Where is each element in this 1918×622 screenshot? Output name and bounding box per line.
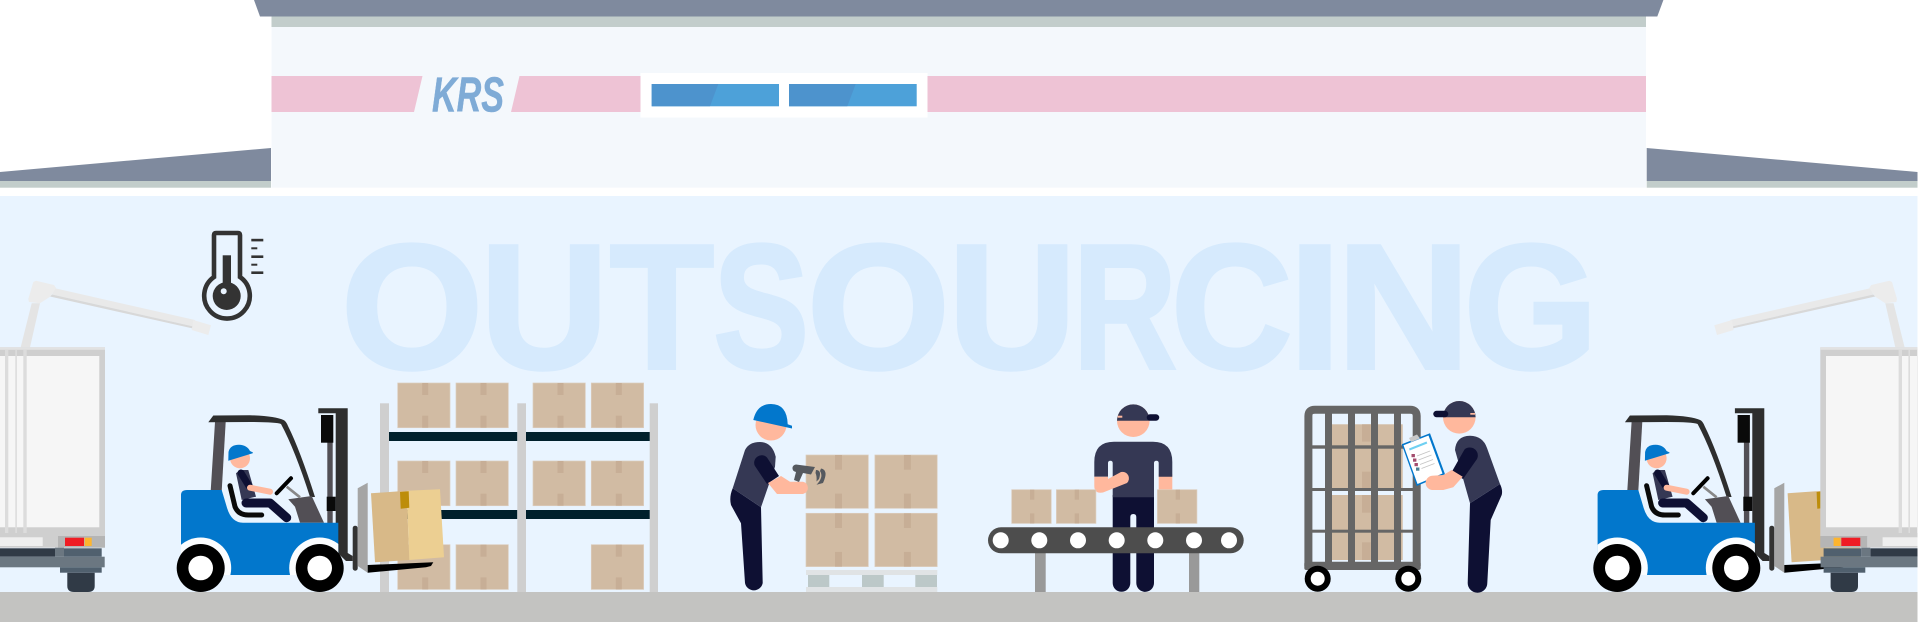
carried box	[371, 489, 444, 562]
forklift body	[181, 490, 338, 575]
left side roof fascia	[0, 181, 271, 188]
blue sign right	[789, 84, 917, 106]
driver	[228, 445, 287, 518]
wheel wells	[170, 538, 350, 598]
steering wheel	[277, 478, 291, 493]
seat	[230, 486, 262, 515]
cart wheels	[1305, 566, 1421, 592]
floor	[0, 592, 1918, 622]
right page edge	[1918, 0, 1919, 622]
right arm	[1159, 474, 1172, 491]
OUTSOURCING background title: O	[807, 209, 950, 406]
cap	[1443, 401, 1476, 417]
torso	[733, 442, 776, 507]
pink stripe left	[272, 76, 422, 112]
rear pillar	[211, 422, 226, 491]
head	[1117, 404, 1150, 437]
icon: thermometer	[204, 233, 263, 319]
head	[756, 410, 786, 440]
OUTSOURCING background title: C	[1171, 209, 1292, 406]
legs	[730, 488, 763, 590]
driver head	[230, 448, 250, 468]
rack posts	[380, 403, 658, 592]
pallet	[806, 570, 937, 592]
mast block	[327, 497, 336, 511]
torso	[1455, 436, 1500, 503]
white plate	[0, 537, 43, 546]
cage bars	[1304, 408, 1421, 570]
driver arm	[250, 488, 270, 492]
sleeve	[1452, 447, 1478, 479]
stacked boxes	[806, 455, 937, 567]
cap brim	[1436, 411, 1445, 417]
frame top strip	[0, 347, 105, 350]
right side roof fascia	[1647, 181, 1918, 188]
pink stripe right	[928, 76, 1646, 112]
OUTSOURCING background title: U	[948, 208, 1076, 406]
warehouse building	[0, 0, 1918, 188]
door bars	[5, 350, 27, 533]
lift cylinder	[321, 415, 333, 443]
tail light orange	[85, 538, 92, 546]
interior background	[0, 196, 1918, 592]
OUTSOURCING background title: I	[1289, 208, 1341, 406]
cab roof and front pillar	[208, 415, 315, 497]
forklift right	[1587, 408, 1861, 598]
tail light red	[65, 538, 84, 546]
steering column	[287, 487, 300, 497]
driver torso	[236, 470, 256, 500]
cargo door panel	[0, 356, 99, 527]
OUTSOURCING background title: O	[341, 208, 483, 406]
KRS logo: KRS	[432, 69, 504, 123]
dashboard	[288, 496, 324, 523]
driver sleeve	[241, 473, 249, 486]
cart boxes	[1332, 424, 1403, 560]
mast upright	[318, 408, 353, 561]
legs	[1113, 495, 1154, 592]
clipboard	[1402, 433, 1445, 486]
worker with scanner	[730, 404, 826, 590]
legs	[1468, 484, 1502, 593]
fork	[368, 562, 433, 573]
top roof	[254, 0, 1663, 16]
cargo box frame	[0, 347, 105, 536]
blue sign left	[652, 84, 779, 106]
cage frame	[1308, 410, 1417, 566]
truck rear right	[1714, 281, 1918, 592]
arm	[1426, 470, 1463, 490]
OUTSOURCING background title: T	[610, 208, 714, 406]
left arm	[1094, 472, 1129, 493]
backrest	[358, 483, 368, 573]
OUTSOURCING background title: G	[1464, 208, 1598, 406]
storage rack with boxes	[380, 383, 658, 592]
head	[1443, 401, 1476, 434]
truck rear left	[0, 281, 211, 592]
rollers	[993, 532, 1237, 548]
OUTSOURCING background title	[341, 208, 1598, 407]
left side roof	[0, 148, 271, 181]
roof arm	[21, 281, 211, 347]
facade wall	[272, 27, 1646, 188]
light housing	[58, 536, 105, 548]
front wheel	[296, 544, 344, 592]
white sign panel	[640, 73, 928, 118]
conveyor boxes	[1012, 490, 1197, 523]
torso	[1094, 442, 1172, 497]
conveyor legs	[1035, 553, 1199, 592]
pink stripe middle	[511, 76, 640, 112]
pallet stack	[806, 455, 937, 592]
forklift	[170, 408, 444, 598]
chassis bands	[0, 548, 105, 573]
scanner	[792, 464, 826, 485]
conveyor belt	[988, 527, 1244, 553]
hard hat	[753, 404, 792, 428]
driver legs	[246, 503, 287, 518]
bumper panel	[0, 536, 58, 548]
roll cage cart	[1304, 408, 1421, 592]
boxes bottom row	[398, 545, 644, 589]
boxes middle row	[398, 461, 644, 506]
driver hard hat	[228, 445, 253, 461]
cap brim	[1150, 414, 1156, 421]
arm	[768, 476, 808, 494]
rear tire	[67, 573, 95, 592]
OUTSOURCING background title: U	[480, 208, 608, 406]
boxes top row	[398, 383, 644, 428]
rack beams	[389, 432, 658, 519]
cap mark	[1118, 416, 1122, 418]
OUTSOURCING background title: N	[1337, 209, 1470, 406]
sleeve	[754, 455, 779, 484]
OUTSOURCING background title: S	[714, 208, 809, 407]
mast rod	[327, 442, 333, 523]
worker with clipboard	[1402, 401, 1502, 593]
cap mark	[1470, 413, 1475, 415]
worker at conveyor	[988, 404, 1244, 592]
right side roof	[1647, 148, 1918, 181]
cap	[1117, 404, 1150, 421]
carriage post	[353, 526, 358, 571]
rear wheel	[177, 544, 225, 592]
OUTSOURCING background title: R	[1073, 209, 1177, 406]
roof fascia	[272, 16, 1646, 27]
